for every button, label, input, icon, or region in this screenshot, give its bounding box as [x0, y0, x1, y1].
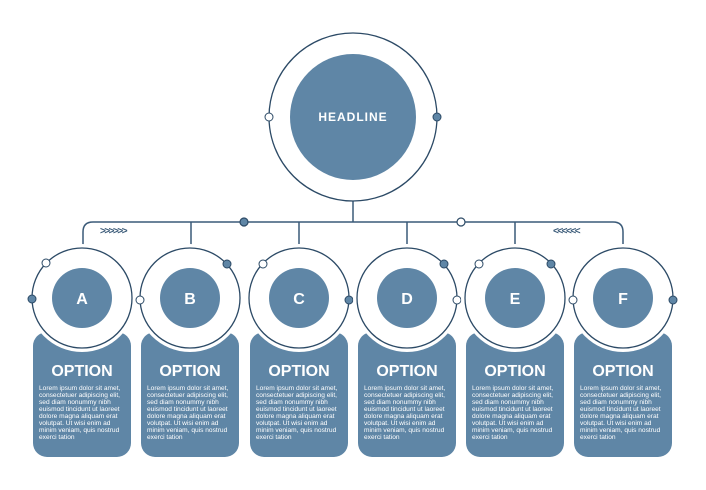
option A: volutpat. Ut wisi enim ad: [39, 420, 111, 427]
option D: dolore magna aliquam erat: [364, 413, 443, 420]
option D: [353, 244, 461, 457]
option F: exerci tation: [580, 434, 616, 441]
option F: dolore magna aliquam erat: [580, 413, 659, 420]
option E: OPTION: [484, 363, 546, 380]
option F: OPTION: [592, 363, 654, 380]
option F: Lorem ipsum dolor sit amet,: [580, 385, 662, 392]
chevrons left: <<<<<<: [553, 226, 581, 237]
option B: volutpat. Ut wisi enim ad: [147, 420, 219, 427]
option C: dolore magna aliquam erat: [256, 413, 335, 420]
headline circle: [265, 33, 441, 201]
option F: [569, 244, 677, 457]
option B: B: [184, 291, 196, 308]
option A: euismod tincidunt ut laoreet: [39, 406, 120, 413]
option D: euismod tincidunt ut laoreet: [364, 406, 445, 413]
option B: [136, 244, 244, 457]
option E: minim veniam, quis nostrud: [472, 427, 553, 434]
option A: [28, 244, 136, 457]
option B: OPTION: [159, 363, 221, 380]
option F: volutpat. Ut wisi enim ad: [580, 420, 652, 427]
option F: consectetuer adipiscing elit,: [580, 392, 661, 399]
option E: dolore magna aliquam erat: [472, 413, 551, 420]
option B: dolore magna aliquam erat: [147, 413, 226, 420]
option E: volutpat. Ut wisi enim ad: [472, 420, 544, 427]
option B: consectetuer adipiscing elit,: [147, 392, 228, 399]
option C: OPTION: [268, 363, 330, 380]
option A: Lorem ipsum dolor sit amet,: [39, 385, 121, 392]
option D: sed diam nonummy nibh: [364, 399, 436, 406]
option C: C: [293, 291, 305, 308]
option D: consectetuer adipiscing elit,: [364, 392, 445, 399]
option D: D: [401, 291, 413, 308]
option C: euismod tincidunt ut laoreet: [256, 406, 337, 413]
option C: exerci tation: [256, 434, 292, 441]
option C: Lorem ipsum dolor sit amet,: [256, 385, 338, 392]
connector lines: [83, 201, 623, 248]
option E: euismod tincidunt ut laoreet: [472, 406, 553, 413]
option D: Lorem ipsum dolor sit amet,: [364, 385, 446, 392]
option C: volutpat. Ut wisi enim ad: [256, 420, 328, 427]
option A: sed diam nonummy nibh: [39, 399, 111, 406]
option C: minim veniam, quis nostrud: [256, 427, 337, 434]
option B: minim veniam, quis nostrud: [147, 427, 228, 434]
option A: OPTION: [51, 363, 113, 380]
option E: [461, 244, 569, 457]
option E: exerci tation: [472, 434, 508, 441]
option C: sed diam nonummy nibh: [256, 399, 328, 406]
option B: sed diam nonummy nibh: [147, 399, 219, 406]
option A: minim veniam, quis nostrud: [39, 427, 120, 434]
option F: F: [618, 291, 628, 308]
option E: consectetuer adipiscing elit,: [472, 392, 553, 399]
option A: exerci tation: [39, 434, 75, 441]
option B: Lorem ipsum dolor sit amet,: [147, 385, 229, 392]
option A: dolore magna aliquam erat: [39, 413, 118, 420]
line dots: [240, 218, 465, 226]
option F: minim veniam, quis nostrud: [580, 427, 661, 434]
option F: sed diam nonummy nibh: [580, 399, 652, 406]
option C: consectetuer adipiscing elit,: [256, 392, 337, 399]
option D: minim veniam, quis nostrud: [364, 427, 445, 434]
option E: E: [510, 291, 521, 308]
option C: [245, 244, 353, 457]
option E: Lorem ipsum dolor sit amet,: [472, 385, 554, 392]
option D: OPTION: [376, 363, 438, 380]
option A: consectetuer adipiscing elit,: [39, 392, 120, 399]
headline circle: HEADLINE: [318, 110, 388, 124]
option A: A: [76, 291, 88, 308]
chevrons right: >>>>>>: [100, 226, 128, 237]
option E: sed diam nonummy nibh: [472, 399, 544, 406]
option D: volutpat. Ut wisi enim ad: [364, 420, 436, 427]
option B: euismod tincidunt ut laoreet: [147, 406, 228, 413]
option F: euismod tincidunt ut laoreet: [580, 406, 661, 413]
option B: exerci tation: [147, 434, 183, 441]
option D: exerci tation: [364, 434, 400, 441]
